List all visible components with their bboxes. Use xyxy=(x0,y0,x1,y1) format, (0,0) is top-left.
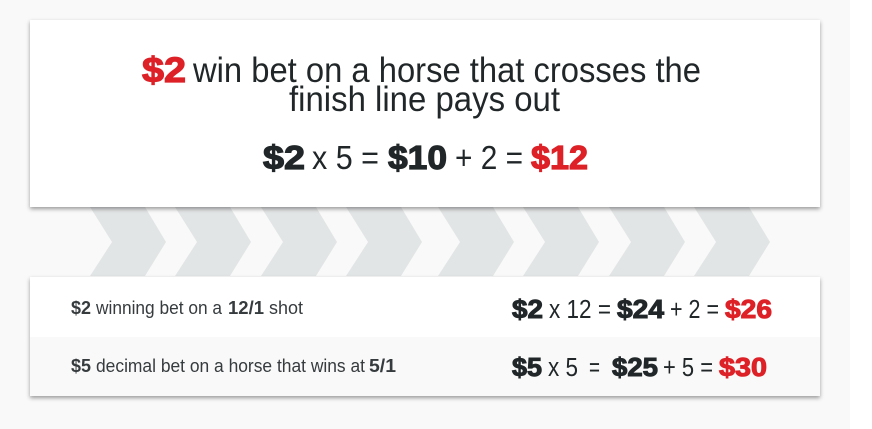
row 2 equation: $25 xyxy=(612,354,658,382)
row 2 equation xyxy=(512,354,767,382)
row 2 description: decimal bet on a horse that wins at xyxy=(96,355,365,376)
row 1 description: 12/1 xyxy=(228,297,264,318)
row 2 equation: x 5 xyxy=(548,354,578,382)
panel: further examples xyxy=(30,277,820,396)
row 1 description: winning bet on a xyxy=(95,297,223,318)
row 1 equation: $26 xyxy=(725,296,772,324)
row 1 description: $2 xyxy=(71,297,91,318)
row 2 description: 5/1 xyxy=(369,355,396,376)
heading: $2 xyxy=(142,51,186,90)
row 2 equation: = xyxy=(589,354,600,382)
main equation: $12 xyxy=(531,139,588,176)
row 1 equation: x 12 = xyxy=(549,296,611,324)
row 1 equation: + 2 = xyxy=(670,296,719,324)
main equation: + 2 = xyxy=(455,139,523,176)
row 1 equation: $2 xyxy=(512,296,543,324)
panel: main example xyxy=(30,20,820,207)
row 1 equation xyxy=(512,296,772,324)
row 2 equation: + 5 = xyxy=(663,354,713,382)
heading xyxy=(142,51,701,119)
row 2 background xyxy=(30,337,820,396)
row 1 equation: $24 xyxy=(617,296,665,324)
row 1 description: shot xyxy=(269,297,303,318)
main equation: x 5 = xyxy=(312,139,379,176)
main equation: $2 xyxy=(263,139,305,176)
main equation xyxy=(263,139,588,176)
heading: finish line pays out xyxy=(289,80,560,119)
row 2 equation: $30 xyxy=(719,354,767,382)
main equation: $10 xyxy=(388,139,447,176)
heading: win bet on a horse that crosses the xyxy=(192,51,701,90)
row 1 description xyxy=(71,297,303,318)
row 2 equation: $5 xyxy=(512,354,542,382)
row 2 description: $5 xyxy=(71,355,91,376)
